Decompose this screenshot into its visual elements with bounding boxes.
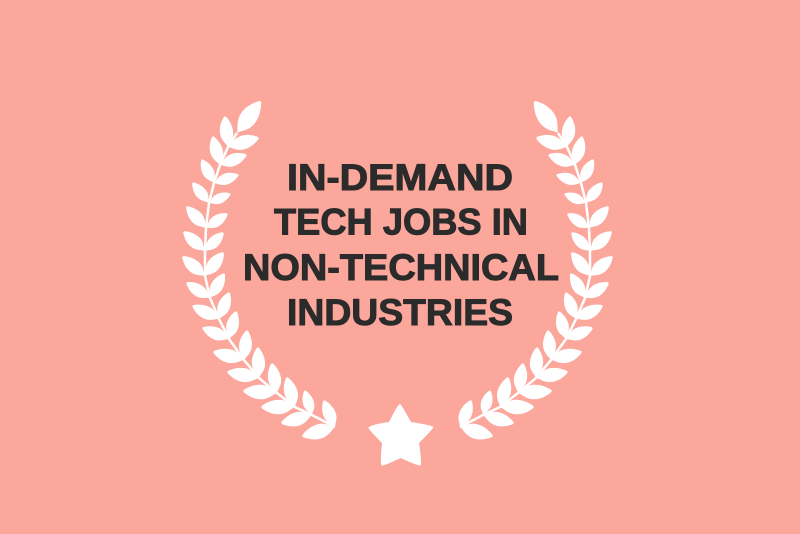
title: TECH JOBS IN (274, 200, 528, 242)
title: NON-TECHNICAL (243, 246, 559, 288)
icon: left laurel branch (178, 96, 341, 443)
title: IN-DEMAND (287, 156, 513, 198)
icon: right laurel branch (454, 96, 617, 443)
icon: star (368, 404, 434, 466)
title (243, 156, 559, 333)
title: INDUSTRIES (287, 291, 513, 333)
